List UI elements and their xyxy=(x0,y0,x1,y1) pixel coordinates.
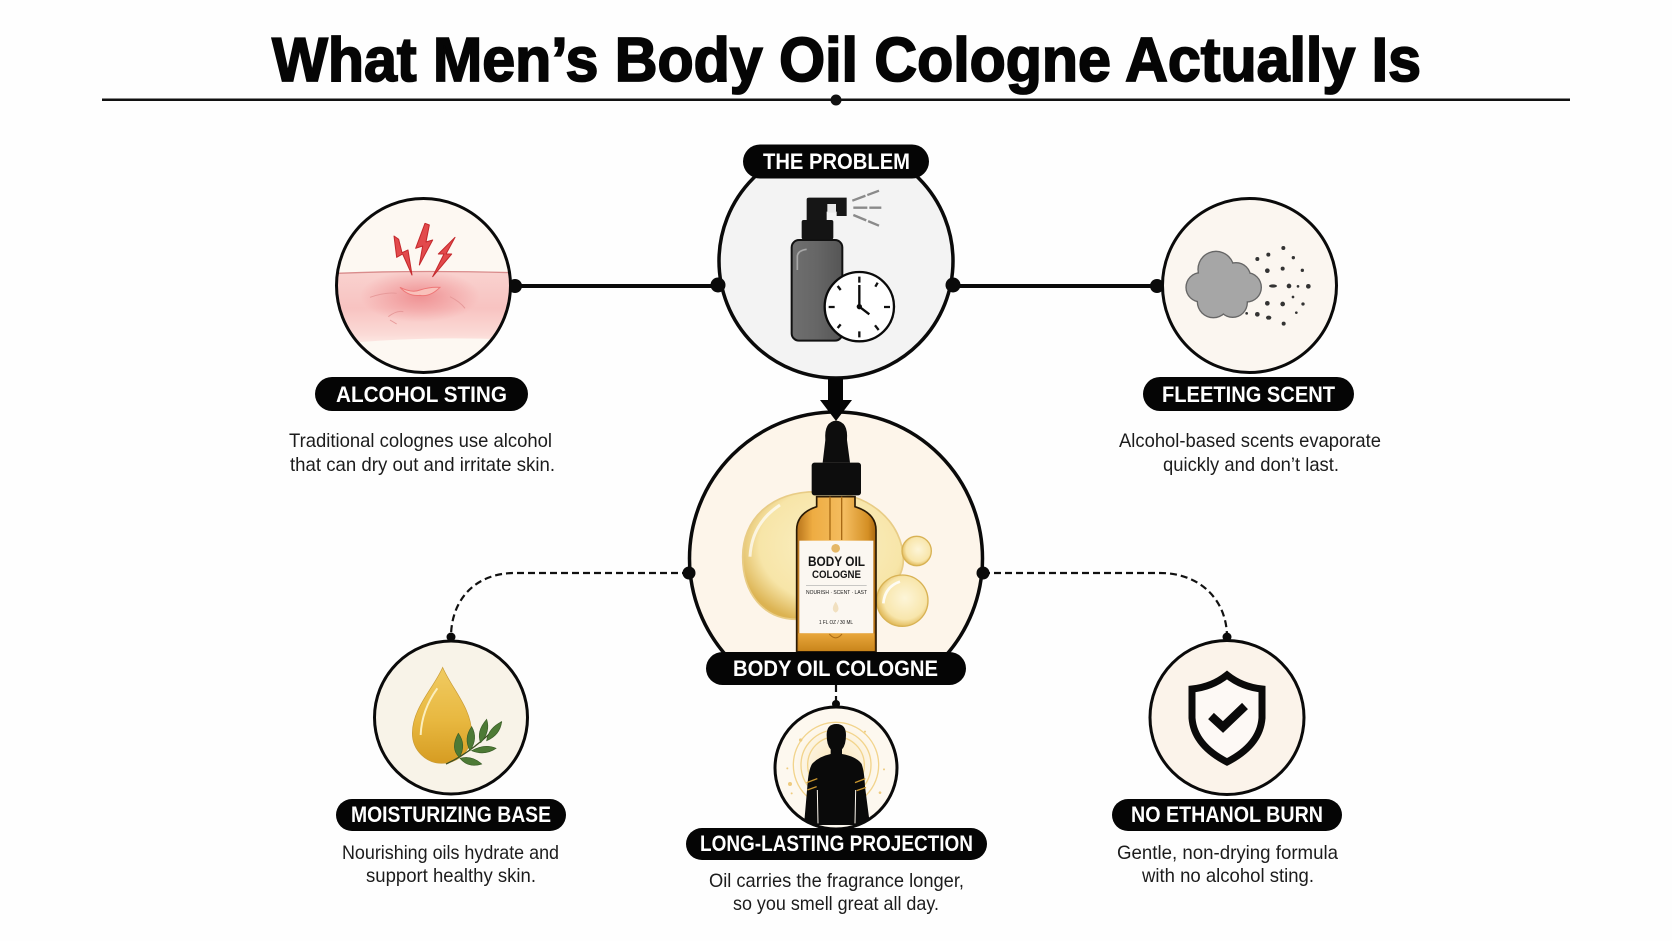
label: fleeting scent: FLEETING SCENT xyxy=(1162,382,1336,407)
label: alcohol sting: ALCOHOL STING xyxy=(336,382,507,407)
icon: man silhouette with scent rings xyxy=(775,707,897,829)
panel: the problem xyxy=(710,144,960,378)
text: moisturizing base: support healthy skin. xyxy=(366,865,536,887)
label: the problem: THE PROBLEM xyxy=(763,149,910,174)
label: long-lasting projection xyxy=(686,828,987,860)
label: alcohol sting xyxy=(315,377,528,411)
icon: evaporating cloud xyxy=(1162,198,1336,372)
connector dots xyxy=(682,566,990,580)
text: alcohol sting xyxy=(289,430,555,476)
text: long-lasting projection xyxy=(709,870,964,915)
panel: alcohol sting xyxy=(289,198,555,476)
center circle xyxy=(688,410,984,652)
panel: moisturizing base xyxy=(336,632,566,887)
text: moisturizing base: Nourishing oils hydrate and xyxy=(342,842,559,864)
icon: spray bottle and clock xyxy=(792,191,894,341)
connector dot xyxy=(1222,632,1232,642)
text: no ethanol burn xyxy=(1117,842,1338,887)
connector dots xyxy=(710,278,960,292)
label: long-lasting projection: LONG-LASTING PROJECTION xyxy=(700,831,973,856)
text: long-lasting projection: so you smell great all day. xyxy=(733,893,939,915)
bottle label text xyxy=(806,554,868,626)
bottle label text: NOURISH · SCENT · LAST xyxy=(806,590,868,596)
panel: long-lasting projection xyxy=(686,700,987,915)
title divider xyxy=(102,94,1570,106)
bottle label text: BODY OIL xyxy=(808,554,865,569)
label: fleeting scent xyxy=(1143,377,1354,411)
arrow: problem to body oil xyxy=(820,378,852,421)
text: fleeting scent: Alcohol-based scents evaporate xyxy=(1119,430,1381,452)
bottle label text: 1 FL OZ / 30 ML xyxy=(819,620,853,626)
label: body oil cologne xyxy=(706,652,966,685)
connector dot xyxy=(832,700,840,708)
connector dot xyxy=(446,632,456,642)
label: moisturizing base: MOISTURIZING BASE xyxy=(351,802,551,827)
solid connectors xyxy=(508,279,1164,293)
text: alcohol sting: Traditional colognes use alcohol xyxy=(289,430,552,452)
dashed connectors xyxy=(451,573,1227,704)
icon: dropper bottle xyxy=(797,421,876,652)
text: moisturizing base xyxy=(342,842,559,887)
panel: body oil cologne xyxy=(682,412,990,705)
panel: no ethanol burn xyxy=(1112,632,1342,887)
text: fleeting scent: quickly and don’t last. xyxy=(1163,454,1339,476)
bottle label text: COLOGNE xyxy=(812,569,861,581)
problem circle xyxy=(717,176,955,380)
text: fleeting scent xyxy=(1119,430,1381,476)
icon: shield with check xyxy=(1150,640,1304,794)
title: What Men’s Body Oil Cologne Actually Is xyxy=(272,26,1421,95)
icon: oil drop and leaves xyxy=(374,641,528,794)
label: no ethanol burn: NO ETHANOL BURN xyxy=(1131,802,1323,827)
text: long-lasting projection: Oil carries the fragrance longer, xyxy=(709,870,964,892)
text: no ethanol burn: with no alcohol sting. xyxy=(1141,865,1314,887)
label: body oil cologne: BODY OIL COLOGNE xyxy=(733,656,938,681)
text: alcohol sting: that can dry out and irritate skin. xyxy=(290,454,555,476)
text: no ethanol burn: Gentle, non-drying formula xyxy=(1117,842,1338,864)
icon: irritated skin xyxy=(330,198,520,372)
label: the problem xyxy=(743,144,929,178)
panel: fleeting scent xyxy=(1119,198,1381,476)
icon: oil droplets xyxy=(743,492,931,626)
